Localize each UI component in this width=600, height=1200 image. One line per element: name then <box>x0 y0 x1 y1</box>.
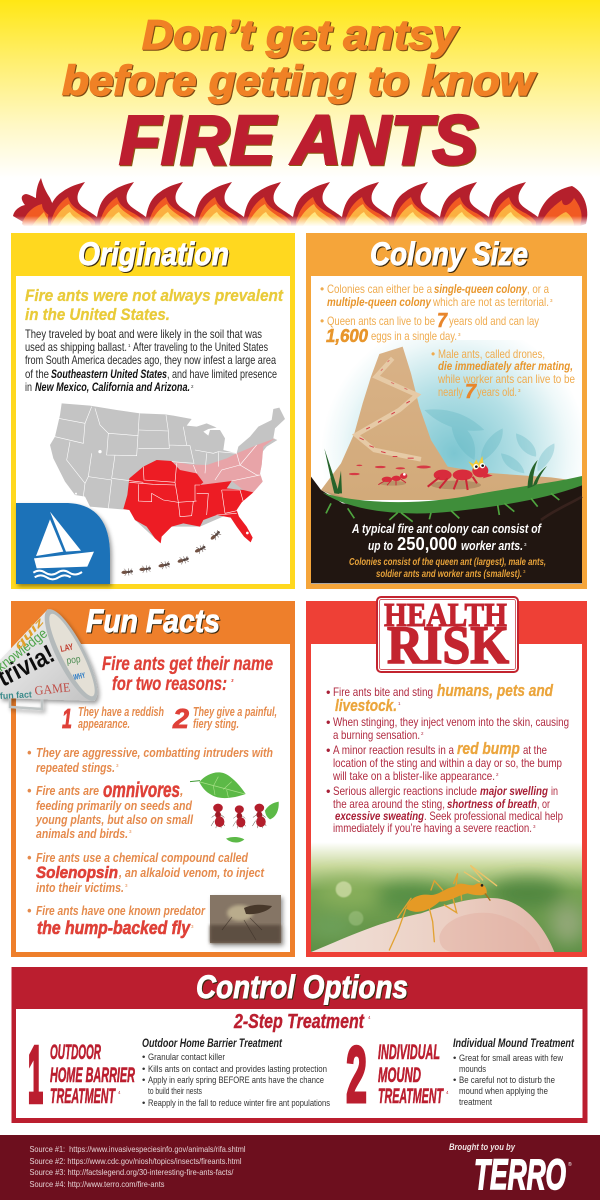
subheading: two reasons: for two reasons: <box>112 674 227 695</box>
photo: hump-backed fly <box>210 895 281 943</box>
fun facts list: into their victims. <box>36 881 124 895</box>
step 1: 4 <box>118 1090 121 1095</box>
colony facts text: Male ants, called drones, <box>438 347 545 361</box>
brand logo: ® <box>568 1161 572 1168</box>
reason 1 <box>62 703 164 734</box>
map: united states <box>50 403 285 543</box>
fun facts list: Solenopsin <box>36 863 118 882</box>
step 2: Great for small areas with few <box>459 1053 563 1064</box>
subheading: 2-step treatment: 2-Step Treatment <box>233 1011 365 1033</box>
health risk list: red bump <box>457 739 520 758</box>
title line 2: before getting to know <box>62 57 536 104</box>
colony facts text: years old. <box>477 385 517 399</box>
reason 1: They have a reddish <box>78 705 164 719</box>
colony facts text: • <box>320 282 324 296</box>
fun facts list: • <box>27 904 32 918</box>
fun facts list: They are aggressive, combatting intruders with <box>36 746 273 760</box>
step 2: TREATMENT <box>378 1085 444 1108</box>
health risk list: major swelling <box>480 784 549 798</box>
colony facts text: die immediately after mating, <box>438 359 573 373</box>
reason 1: 1 <box>62 703 72 734</box>
health risk list <box>326 681 569 835</box>
reason 2: fiery sting. <box>193 717 239 731</box>
body text: Southeastern United States <box>51 367 167 381</box>
step 2: Be careful not to disturb the <box>459 1075 555 1086</box>
body text <box>25 327 277 394</box>
health risk list: 2 <box>496 772 499 777</box>
subheading: 2-step treatment: 4 <box>368 1015 371 1020</box>
step 2: 4 <box>446 1090 449 1095</box>
heading: control options: Control Options <box>196 969 408 1005</box>
health risk list: • <box>326 685 330 699</box>
fun facts list: Fire ants use a chemical compound called <box>36 851 248 865</box>
fun facts list <box>27 746 273 938</box>
step 2: mounds <box>459 1064 486 1075</box>
sources: Source #4: http://www.terro.com/fire-ants <box>30 1179 164 1189</box>
fun facts list: , <box>179 784 183 798</box>
colony facts text: • <box>431 347 435 361</box>
step 1: 1 <box>28 1030 43 1119</box>
step 1: Granular contact killer <box>148 1052 225 1063</box>
fun facts list: • <box>27 746 32 760</box>
flame border <box>0 178 600 230</box>
step 1: Reapply in the fall to reduce winter fire ant populations <box>148 1098 330 1109</box>
fun facts list: 3 <box>129 829 132 834</box>
health risk list: 2 <box>421 731 424 736</box>
colony facts text: , or a <box>527 282 549 296</box>
health risk list: Fire ants bite and sting <box>333 685 433 699</box>
step 1: Kills ants on contact and provides lasting protection <box>148 1064 327 1075</box>
step 2: • <box>453 1053 456 1064</box>
icon: megaphone: pop <box>66 654 82 667</box>
step 1: Outdoor Home Barrier Treatment <box>142 1036 283 1050</box>
step 1 <box>28 1030 330 1119</box>
icon: megaphone: WHY <box>73 671 87 682</box>
title <box>62 11 536 179</box>
colony facts text: 1,600 <box>326 326 368 346</box>
fun facts list: , an alkaloid venom, to inject <box>118 866 265 880</box>
step 1: • <box>142 1052 145 1063</box>
fun facts list: 3 <box>116 763 119 768</box>
sources: Source #3: http://factslegend.org/30-interesting-fire-ants-facts/ <box>30 1167 234 1177</box>
body text: , and have limited presence <box>167 367 277 381</box>
health risk list: the area around the sting, <box>333 797 445 811</box>
health risk list: 3 <box>533 824 536 829</box>
colony callout: soldier ants and worker ants (smallest). <box>376 569 522 580</box>
colony facts text: 3 <box>550 298 553 303</box>
icon: megaphone: GAME <box>34 679 71 698</box>
colony facts text <box>320 282 575 403</box>
body text: 1 <box>128 343 131 348</box>
illustration: ants carrying leaf <box>190 772 279 842</box>
queen ant <box>428 456 493 490</box>
reason 2: They give a painful, <box>193 705 277 719</box>
photo: ant on finger <box>311 844 582 952</box>
health risk list: • <box>326 715 330 729</box>
colony callout: up to <box>368 538 393 553</box>
panel: origination <box>11 233 295 589</box>
body text: They traveled by boat and were likely in the soil that was <box>25 327 262 341</box>
fun facts list: omnivores <box>103 779 180 802</box>
illustration: ant mound <box>311 340 583 583</box>
panel: fun facts <box>0 601 295 957</box>
colony facts text: 3 <box>458 332 461 337</box>
title main: FIRE ANTS <box>119 101 478 179</box>
step 1: OUTDOOR <box>50 1041 101 1064</box>
fun facts list: young plants, but also on small <box>35 813 193 827</box>
subheading: two reasons: 3 <box>231 678 234 683</box>
colony callout: A typical fire ant colony can consist of <box>351 521 542 536</box>
fun facts list: the hump-backed fly <box>37 918 191 938</box>
health risk list: • <box>326 784 330 798</box>
colony facts text: 7 <box>437 310 448 332</box>
health risk list: A minor reaction results in a <box>333 743 454 757</box>
fun facts list: 3 <box>125 883 128 888</box>
fun facts list: • <box>27 784 32 798</box>
step 2: treatment <box>459 1097 492 1108</box>
colony facts text: 3 <box>518 388 521 393</box>
health risk list: , or <box>537 797 550 811</box>
body text: in <box>25 380 32 394</box>
heading: origination: Origination <box>78 236 229 272</box>
sources: Source #2: https://www.cdc.gov/niosh/topics/insects/fireants.html <box>30 1156 242 1166</box>
panel: health risk <box>306 597 587 957</box>
colony facts text: while worker ants can live to be <box>437 372 575 386</box>
sources: Source #1: https://www.invasivespeciesinfo.gov/animals/rifa.shtml <box>30 1144 246 1154</box>
step 2: MOUND <box>378 1064 421 1087</box>
health risk list: livestock. <box>335 696 397 715</box>
icon: sailboat <box>16 503 110 584</box>
fun facts list: repeated stings. <box>36 761 115 775</box>
step 2 <box>346 1030 575 1119</box>
health risk list: • <box>326 743 330 757</box>
health risk list: immediately if you’re having a severe reaction. <box>333 821 532 835</box>
brand logo: Brought to you by <box>449 1142 516 1153</box>
brand logo <box>449 1142 572 1199</box>
heading: fun facts: Fun Facts <box>86 603 220 639</box>
fun facts list: Fire ants have one known predator <box>36 904 206 918</box>
ants trail <box>121 529 222 576</box>
colony callout: 3 <box>524 542 527 547</box>
footer <box>0 1135 600 1200</box>
colony callout: 3 <box>523 569 526 574</box>
panel: colony size <box>306 233 587 589</box>
body text: of the <box>25 367 49 381</box>
body text: After traveling to the United States <box>133 340 268 354</box>
icon: megaphone <box>0 603 107 709</box>
health risk list: excessive sweating <box>335 809 425 823</box>
colony facts text: single-queen colony <box>434 282 528 296</box>
body text: 2 <box>191 384 194 389</box>
step 2: 2 <box>346 1030 367 1119</box>
body text: from South America decades ago, they now infest a large area <box>25 353 276 367</box>
reason 1: appearance. <box>78 717 130 731</box>
colony facts text: 7 <box>465 381 477 403</box>
step 1: • <box>142 1075 145 1086</box>
step 2: • <box>453 1075 456 1086</box>
health risk list: . Seek professional medical help <box>424 809 563 823</box>
health risk list: Serious allergic reactions include <box>333 784 477 798</box>
colony facts text: Colonies can either be a <box>327 282 432 296</box>
colony facts text: years old and can lay <box>449 314 539 328</box>
title line 1: Don’t get antsy <box>142 11 460 58</box>
icon: megaphone: quiz <box>12 615 47 652</box>
step 2: INDIVIDUAL <box>378 1041 440 1064</box>
health risk list: at the <box>523 743 547 757</box>
subheading: two reasons <box>102 654 273 695</box>
subheading <box>25 286 284 324</box>
step 2: mound when applying the <box>459 1086 548 1097</box>
fun facts list: Fire ants are <box>36 784 99 798</box>
health risk list: will take on a blister-like appearance. <box>332 769 495 783</box>
step 1: • <box>142 1098 145 1109</box>
subheading: Fire ants were not always prevalent <box>25 286 284 305</box>
fun facts list: feeding primarily on seeds and <box>36 799 192 813</box>
colony callout: Colonies consist of the queen ant (largest), male ants, <box>349 557 546 568</box>
step 1: • <box>142 1064 145 1075</box>
reason 2: 2 <box>172 703 189 734</box>
step 1: HOME BARRIER <box>50 1064 135 1087</box>
icon: megaphone: LAY <box>59 641 74 654</box>
colony callout <box>349 521 546 580</box>
health risk list: a burning sensation. <box>333 728 420 742</box>
colony facts text: Queen ants can live to be <box>327 314 435 328</box>
health risk stamp: RISK <box>387 615 509 675</box>
step 1: Apply in early spring BEFORE ants have the chance <box>148 1075 324 1086</box>
health risk list: shortness of breath <box>447 797 537 811</box>
heading: colony size: Colony Size <box>370 236 528 272</box>
health risk list: in <box>551 784 558 798</box>
subheading: two reasons: Fire ants get their name <box>102 654 273 675</box>
fun facts list: • <box>27 851 32 865</box>
colony facts text: nearly <box>438 385 463 399</box>
worker ant <box>378 473 407 485</box>
body text: New Mexico, California and Arizona. <box>35 380 190 394</box>
fun facts list: animals and birds. <box>36 827 128 841</box>
step 1: TREATMENT <box>50 1085 116 1108</box>
colony facts text: eggs in a single day. <box>371 329 457 343</box>
panel: control options <box>12 967 588 1123</box>
health risk stamp: HEALTH <box>384 597 507 634</box>
colony callout: 250,000 <box>397 534 457 554</box>
body text: used as shipping ballast. <box>25 340 127 354</box>
health risk list: humans, pets and <box>437 681 553 700</box>
header gradient <box>0 0 600 178</box>
icon: megaphone: fun fact <box>0 689 32 701</box>
colony facts text: • <box>320 314 324 328</box>
step 1: to build their nests <box>148 1086 202 1097</box>
fun facts list: 3 <box>191 924 194 929</box>
subheading: in the United States. <box>25 305 170 324</box>
reason 2 <box>172 703 277 734</box>
colony facts text: multiple-queen colony <box>327 295 432 309</box>
colony callout: worker ants. <box>461 538 523 553</box>
sources <box>30 1144 246 1189</box>
colony facts text: which are not as territorial. <box>432 295 549 309</box>
health risk list: 1 <box>398 701 401 706</box>
